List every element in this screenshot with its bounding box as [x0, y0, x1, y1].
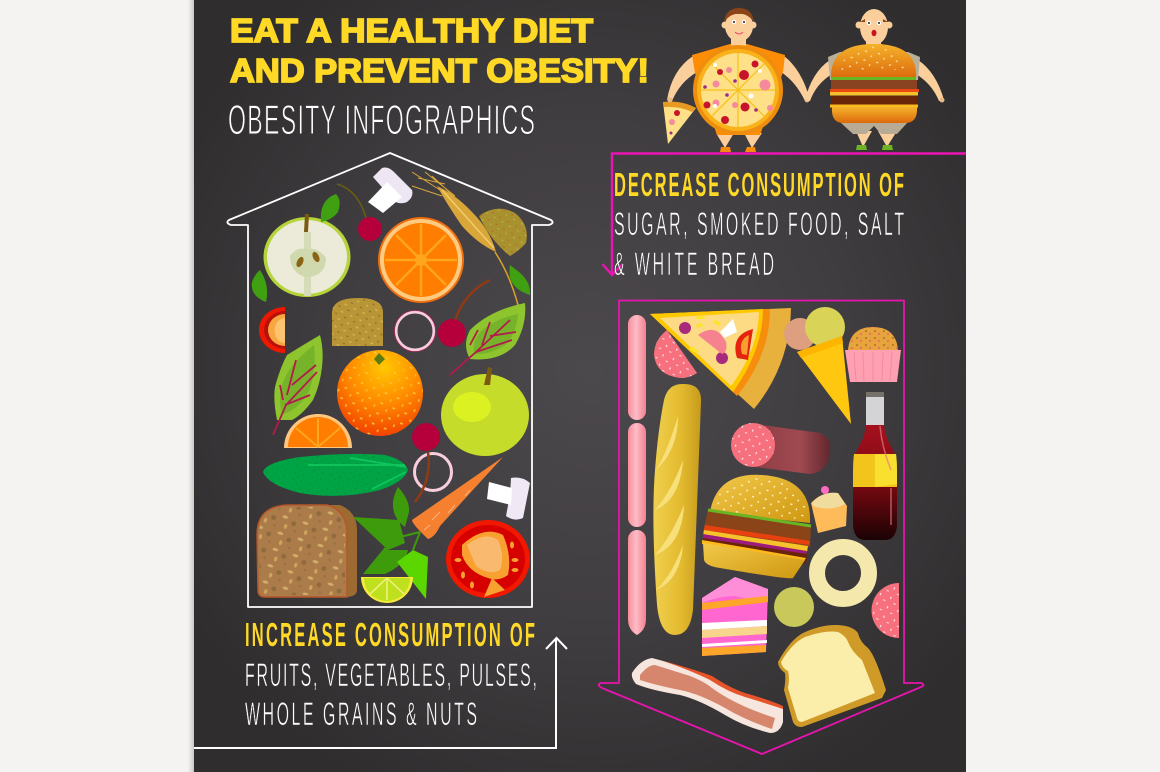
- grain bread small: [332, 298, 383, 346]
- title: [230, 12, 649, 89]
- pizza slice: [650, 308, 791, 409]
- green leaves: [353, 487, 428, 599]
- bacon: [632, 658, 783, 733]
- house outline: [227, 153, 553, 607]
- wheat stalk: [412, 172, 518, 305]
- brown bread: [257, 505, 357, 597]
- obese man with burger: [805, 9, 944, 150]
- onion ring: [394, 310, 436, 352]
- dark background panel: [194, 0, 966, 772]
- increase heading: INCREASE CONSUMPTION OF: [245, 616, 535, 654]
- magenta connector arrow: [602, 154, 966, 275]
- tomato: [446, 520, 530, 598]
- magenta arrow outline: [599, 300, 924, 754]
- cucumber: [263, 454, 408, 496]
- increase text: FRUITS, VEGETABLES, PULSES,: [245, 658, 537, 694]
- sausages: [628, 315, 646, 635]
- cherry and onion ring: [412, 423, 452, 502]
- healthy foods: [252, 168, 530, 603]
- title: AND PREVENT OBESITY!: [230, 52, 649, 89]
- leaf and cherry: [321, 184, 382, 241]
- lime half: [361, 577, 413, 603]
- layered cake: [702, 577, 768, 656]
- muffin: [845, 327, 901, 382]
- cola bottle: [853, 392, 897, 540]
- burger: [702, 475, 811, 578]
- head: [856, 9, 892, 47]
- small cake: [811, 486, 847, 533]
- decrease text: & WHITE BREAD: [614, 247, 774, 283]
- increase text: WHOLE GRAINS & NUTS: [245, 697, 477, 733]
- pizza slice in hand: [663, 102, 696, 144]
- green ball: [774, 587, 814, 627]
- decrease text: SUGAR, SMOKED FOOD, SALT: [614, 207, 904, 243]
- mushroom: [487, 478, 530, 520]
- chard leaf left: [273, 335, 323, 435]
- green apple: [441, 367, 529, 456]
- obese man with pizza: [663, 8, 810, 152]
- leaf: [510, 265, 530, 295]
- mushroom: [368, 168, 412, 213]
- carrot: [412, 457, 503, 539]
- pizza body: [693, 45, 783, 135]
- increase text: [245, 658, 537, 733]
- decrease heading: DECREASE CONSUMPTION OF: [614, 166, 904, 204]
- whole orange: [337, 350, 423, 436]
- white bread slice: [778, 625, 886, 727]
- decrease text: [614, 207, 904, 283]
- cherry: [438, 280, 490, 347]
- grain roll half: [479, 209, 527, 256]
- subtitle: OBESITY INFOGRAPHICS: [228, 97, 535, 144]
- burger body: [830, 44, 919, 123]
- chard leaf right: [450, 303, 525, 375]
- baguette: [653, 384, 701, 635]
- salami half: [872, 583, 899, 638]
- onion ring: [817, 547, 869, 599]
- ice cream: [784, 307, 851, 424]
- orange slice: [378, 217, 464, 303]
- half tomato: [259, 307, 285, 353]
- arms and legs: [667, 56, 810, 101]
- leaf: [252, 270, 267, 302]
- head: [722, 8, 756, 46]
- white arrow: [194, 638, 567, 748]
- title: EAT A HEALTHY DIET: [230, 12, 593, 49]
- salami half: [654, 330, 697, 378]
- unhealthy foods: [628, 307, 901, 733]
- arms and legs: [805, 60, 944, 101]
- salami: [731, 423, 830, 474]
- cut apple: [264, 214, 350, 297]
- half orange: [284, 414, 352, 448]
